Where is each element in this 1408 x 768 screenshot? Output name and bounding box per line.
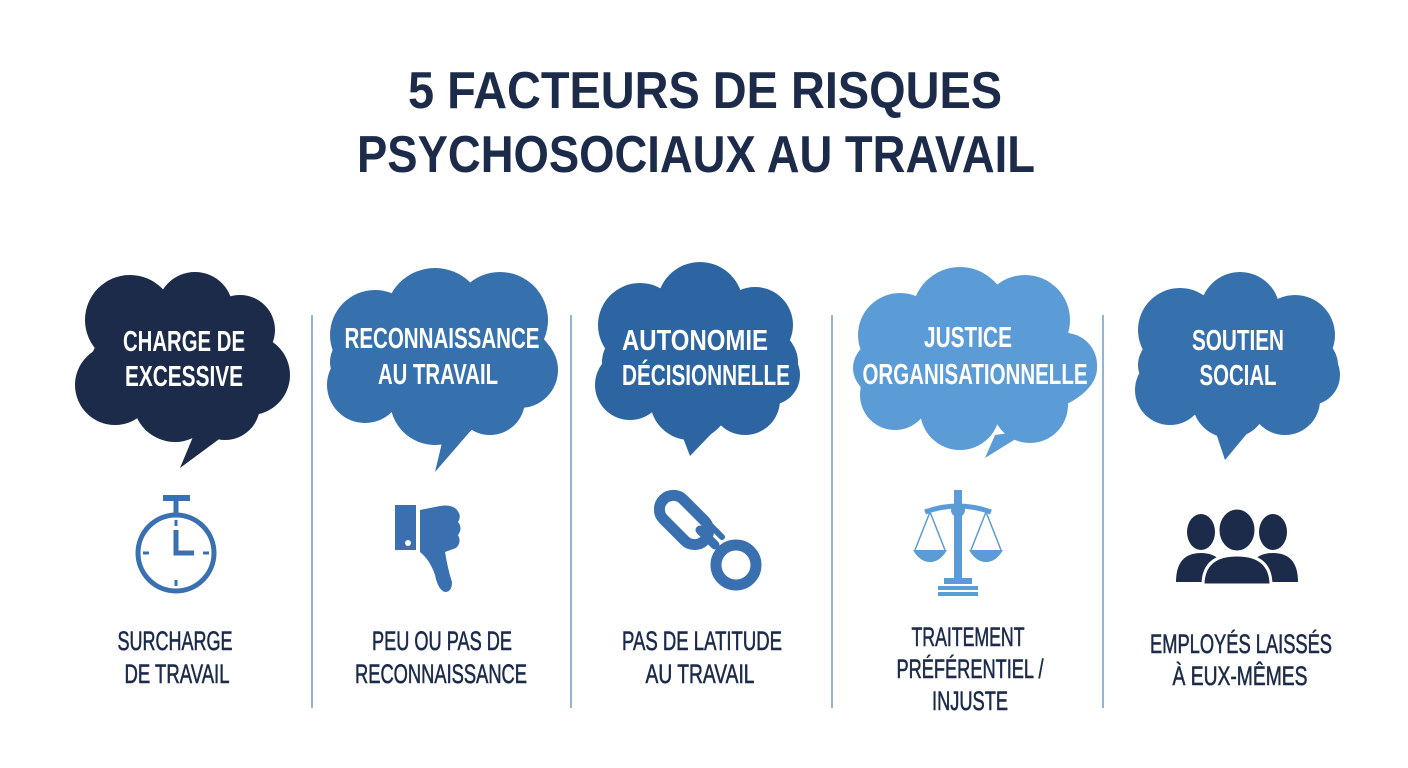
panel: justice <box>853 267 1097 716</box>
title: PSYCHOSOCIAUX AU TRAVAIL <box>357 126 1035 184</box>
cloud 1: CHARGE DE <box>123 326 245 358</box>
icon: chain <box>654 490 756 585</box>
icon: thumb down <box>395 505 460 592</box>
text: employés: À EUX-MÊMES <box>1172 660 1308 691</box>
panel: autonomie <box>595 262 800 689</box>
text: peu ou pas: RECONNAISSANCE <box>355 659 527 689</box>
cloud 2 <box>327 268 558 472</box>
cloud 3 <box>595 262 800 456</box>
icon: stopwatch <box>138 498 214 591</box>
text: latitude <box>622 626 782 689</box>
panel: charge excessive <box>75 272 290 689</box>
cloud 5 <box>1135 272 1340 460</box>
cloud 3: DÉCISIONNELLE <box>622 358 790 392</box>
text: surcharge: DE TRAVAIL <box>124 659 230 689</box>
cloud 5: SOCIAL <box>1200 360 1276 392</box>
text: employés <box>1150 629 1332 691</box>
cloud 2: RECONNAISSANCE <box>344 323 540 355</box>
icon: people <box>1176 508 1298 585</box>
text: traitement <box>896 622 1044 716</box>
cloud 1: EXCESSIVE <box>125 361 243 393</box>
panel: reconnaissance <box>327 268 558 689</box>
icon: scale <box>913 490 1003 596</box>
cloud 1 <box>75 272 290 468</box>
cloud 3: AUTONOMIE <box>622 325 768 357</box>
text: surcharge <box>118 626 232 689</box>
cloud 4 <box>853 267 1097 458</box>
text: peu ou pas: PEU OU PAS DE <box>372 626 512 656</box>
text: latitude: PAS DE LATITUDE <box>622 626 782 656</box>
text: traitement: TRAITEMENT <box>912 622 1024 652</box>
cloud 4: ORGANISATIONNELLE <box>862 359 1088 391</box>
cloud 5: SOUTIEN <box>1192 325 1284 357</box>
text: peu ou pas <box>355 626 527 689</box>
text: latitude: AU TRAVAIL <box>646 659 754 689</box>
title: 5 FACTEURS DE RISQUES <box>408 62 1002 120</box>
title <box>357 62 1035 184</box>
text: surcharge: SURCHARGE <box>118 626 232 656</box>
text: traitement: PRÉFÉRENTIEL / <box>896 654 1044 684</box>
cloud 4: JUSTICE <box>924 322 1012 354</box>
text: traitement: INJUSTE <box>932 686 1008 716</box>
panel: soutien social <box>1135 272 1340 691</box>
cloud 2: AU TRAVAIL <box>378 359 498 391</box>
